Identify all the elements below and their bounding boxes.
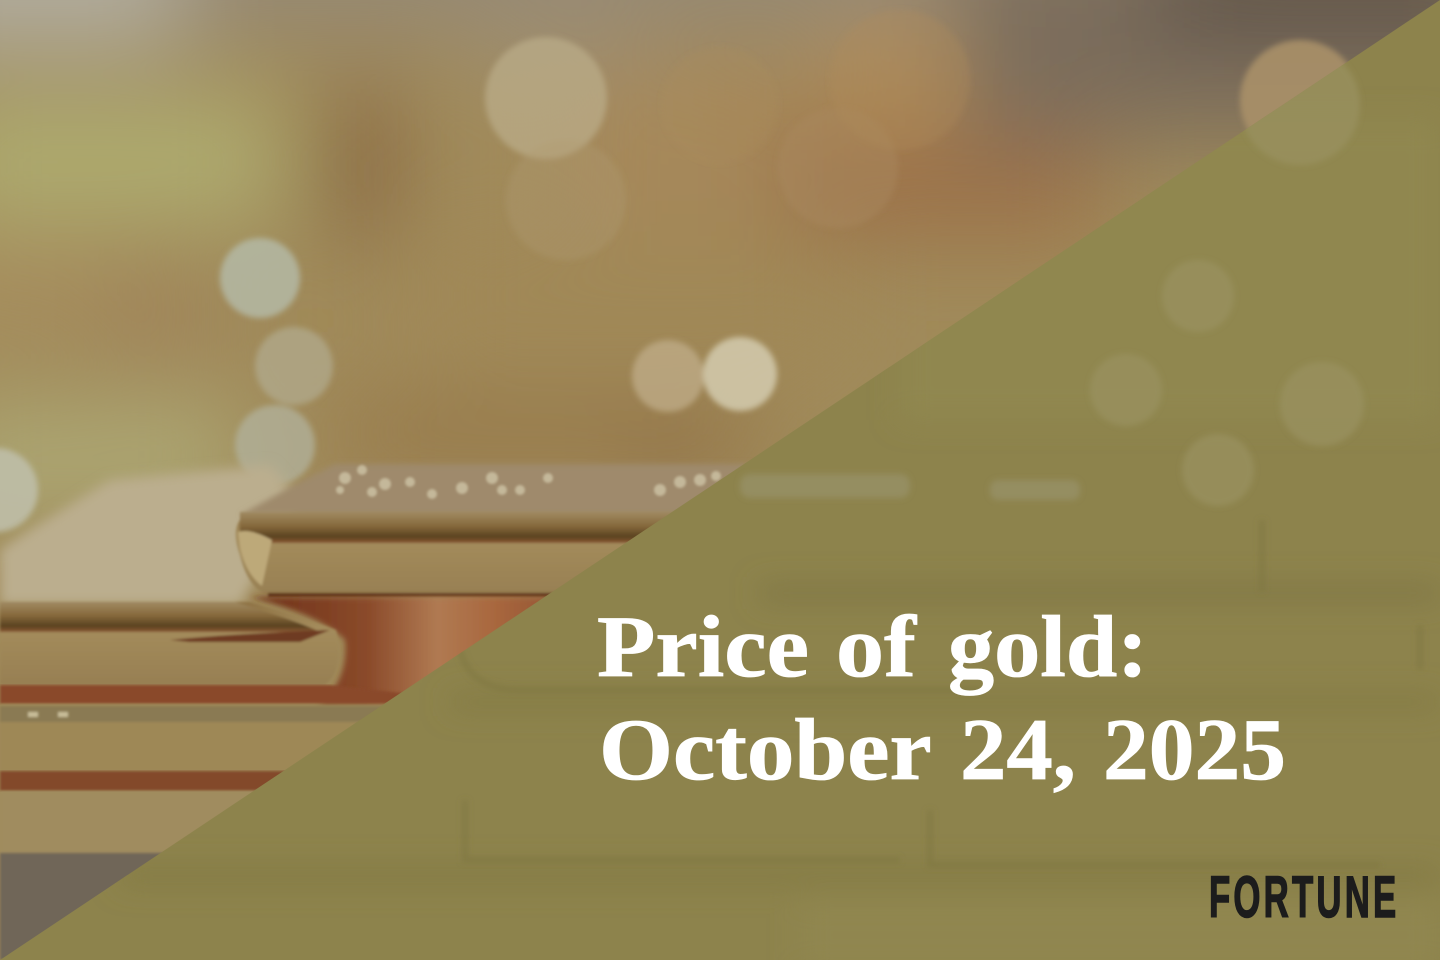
rust reflection between bars (250, 597, 640, 720)
gold bars stack (0, 464, 770, 960)
title line 2: October (599, 702, 931, 799)
bottom gold bar (0, 791, 300, 853)
title (597, 599, 1286, 799)
rust band (0, 685, 420, 704)
pale surface of lower bar (0, 465, 300, 605)
rust band lower (0, 771, 320, 791)
Fortune logo: FORTUNE (1209, 866, 1396, 930)
title line 2: 24, (960, 702, 1076, 799)
title line 1: of (836, 599, 918, 696)
faint bars and lights under overlay (465, 65, 1376, 866)
top gold bar surface with grains (240, 464, 770, 515)
bokeh lights (0, 10, 1360, 532)
title line 2: 2025 (1103, 702, 1286, 799)
third gold bar (0, 704, 400, 771)
dark table (0, 853, 260, 960)
title line 1: Price (597, 599, 809, 696)
title line 1: gold: (948, 599, 1148, 696)
top gold bar (236, 512, 760, 597)
second gold bar (0, 602, 339, 685)
